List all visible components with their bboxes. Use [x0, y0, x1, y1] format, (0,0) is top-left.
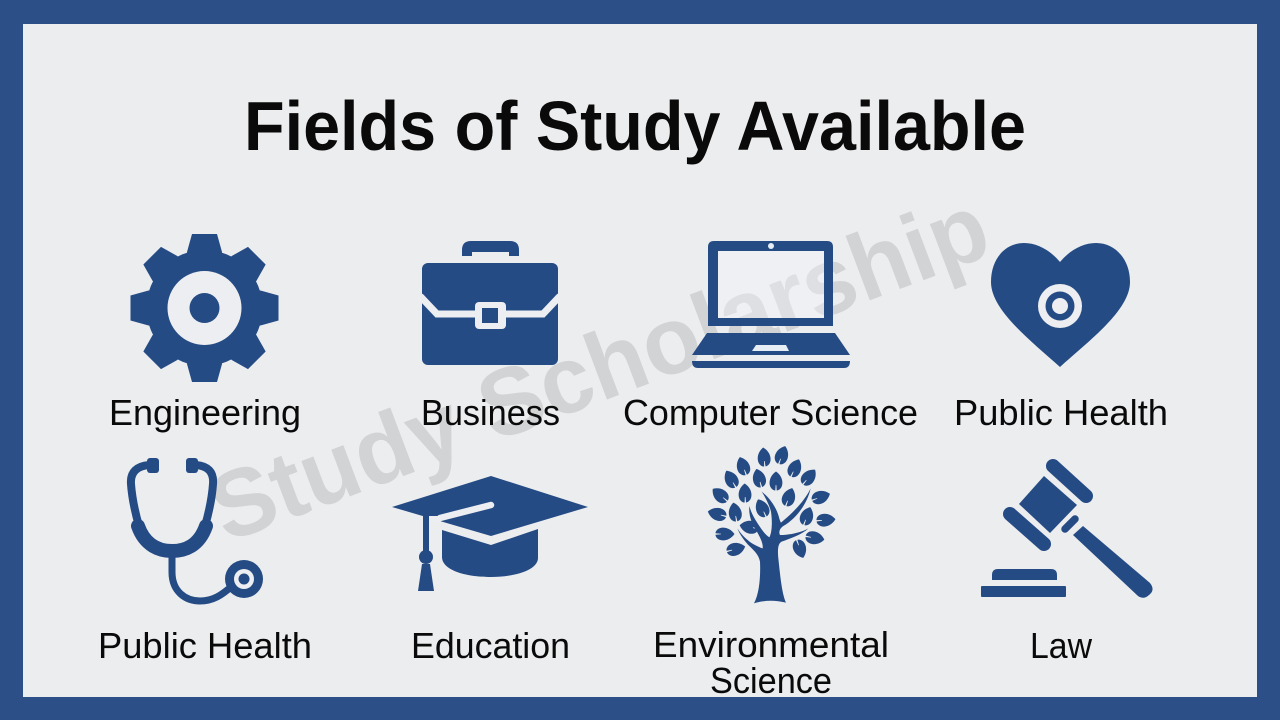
icon: gavel	[981, 466, 1153, 598]
label: Public Health (top): Public Health	[954, 392, 1168, 433]
icon: graduation cap	[392, 476, 588, 591]
icon: stethoscope	[131, 458, 263, 601]
label: Environmental Science: Science	[710, 660, 832, 701]
icon: briefcase	[420, 241, 560, 365]
label: Business: Business	[421, 392, 560, 433]
label: Public Health (bottom): Public Health	[98, 625, 312, 666]
label: Environmental Science: Environmental	[653, 624, 889, 665]
label: Education: Education	[411, 625, 570, 666]
icon: laptop	[692, 241, 850, 368]
watermark: Study Scholarship	[196, 174, 1003, 563]
title: Fields of Study Available	[244, 87, 1026, 165]
label: Engineering: Engineering	[109, 392, 301, 433]
label: Law: Law	[1030, 625, 1093, 666]
label: Computer Science: Computer Science	[623, 392, 918, 433]
label: Environmental Science	[653, 624, 889, 701]
icon: tree	[706, 444, 836, 603]
icon: gear	[130, 234, 278, 382]
icon: heart	[991, 243, 1130, 367]
